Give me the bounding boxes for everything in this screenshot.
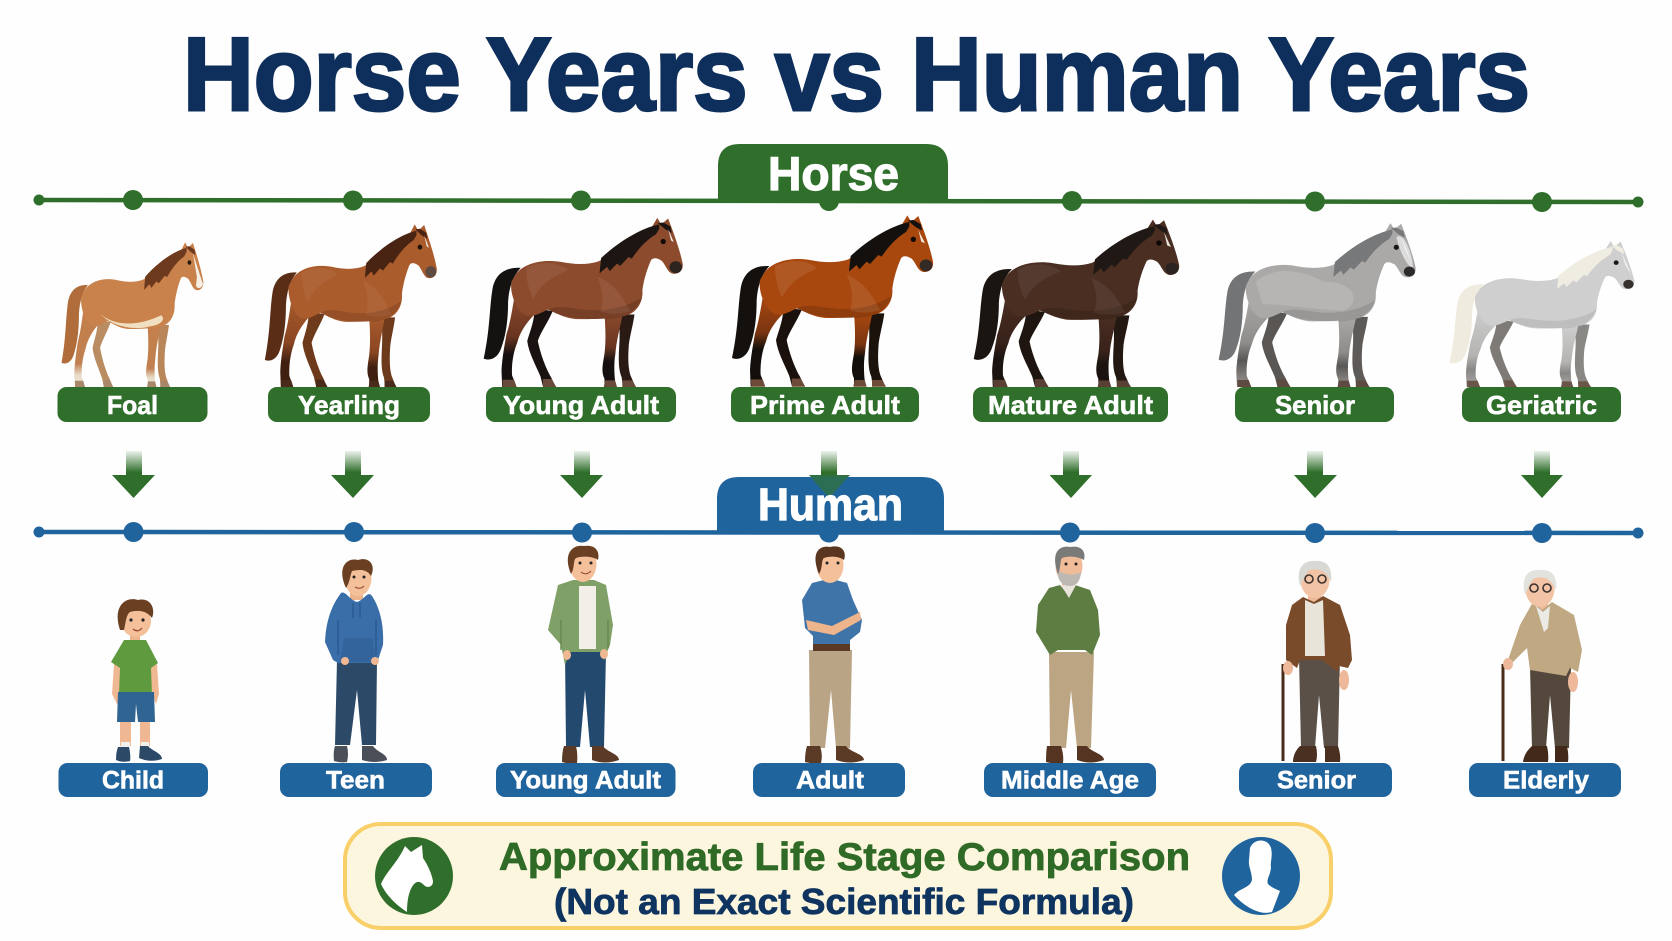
arrow 2	[331, 451, 374, 498]
person: elderly	[1502, 570, 1582, 762]
horse: yearling	[265, 224, 437, 387]
label: Teen	[280, 763, 432, 797]
label: Mature Adult	[973, 387, 1168, 422]
icon: horse head	[375, 837, 453, 915]
arrow 6	[1294, 451, 1337, 498]
human timeline	[34, 522, 1644, 543]
label: Young Adult	[496, 763, 676, 797]
human row	[111, 546, 1582, 763]
horse: mature adult	[974, 220, 1179, 387]
person: senior	[1282, 561, 1352, 762]
horse: prime adult	[732, 215, 933, 387]
down arrows	[112, 451, 1563, 498]
label: Teen: Teen	[326, 766, 385, 794]
horse: young adult	[484, 218, 683, 387]
label: Prime Adult	[731, 387, 919, 422]
horse: geriatric	[1449, 241, 1634, 387]
horse: senior	[1219, 223, 1416, 387]
label: Elderly	[1469, 763, 1621, 797]
label: Middle Age	[984, 763, 1156, 797]
arrow 7	[1521, 451, 1563, 498]
horse: foal	[62, 242, 203, 387]
heading: Human: Human	[758, 479, 903, 530]
label: Senior	[1235, 387, 1394, 422]
callout: approximate comparison	[345, 824, 1331, 928]
person: middle age	[1036, 547, 1104, 763]
heading: Horse	[718, 144, 948, 202]
label: Foal	[58, 387, 208, 422]
label: Senior: Senior	[1275, 390, 1355, 420]
person: young adult	[548, 546, 619, 763]
label: Elderly: Elderly	[1503, 766, 1589, 794]
arrow 5	[1050, 451, 1092, 498]
heading: Human	[717, 475, 944, 533]
callout text: (Not an Exact Scientific Formula)	[554, 881, 1134, 922]
label: Young Adult: Young Adult	[503, 390, 659, 420]
horse stage labels	[58, 387, 1621, 422]
person: adult	[802, 546, 864, 763]
arrow 4	[809, 451, 850, 490]
person: teen	[325, 559, 387, 762]
label: Senior	[1239, 763, 1392, 797]
label: Child	[58, 763, 208, 797]
label: Mature Adult: Mature Adult	[988, 390, 1153, 420]
label: Adult: Adult	[796, 766, 865, 794]
arrow 3	[560, 451, 603, 498]
horse timeline	[34, 190, 1644, 212]
heading: Horse: Horse	[768, 147, 899, 200]
label: Geriatric: Geriatric	[1486, 390, 1597, 420]
label: Senior: Senior	[1277, 766, 1356, 794]
label: Middle Age: Middle Age	[1001, 766, 1139, 794]
person: child	[111, 599, 162, 762]
label: Geriatric	[1462, 387, 1621, 422]
callout text	[499, 836, 1190, 922]
callout text: Approximate Life Stage Comparison	[499, 836, 1190, 879]
label: Yearling: Yearling	[298, 390, 400, 420]
title: Horse Years vs Human Years	[183, 17, 1530, 133]
label: Prime Adult: Prime Adult	[750, 390, 900, 420]
label: Young Adult	[486, 387, 676, 422]
label: Child: Child	[102, 766, 164, 794]
label: Foal: Foal	[107, 390, 158, 420]
arrow 1	[112, 451, 155, 498]
label: Yearling	[268, 387, 430, 422]
label: Young Adult: Young Adult	[510, 766, 662, 794]
horse row	[62, 215, 1634, 387]
label: Adult	[753, 763, 905, 797]
human stage labels	[58, 763, 1621, 797]
icon: human bust	[1222, 837, 1300, 915]
